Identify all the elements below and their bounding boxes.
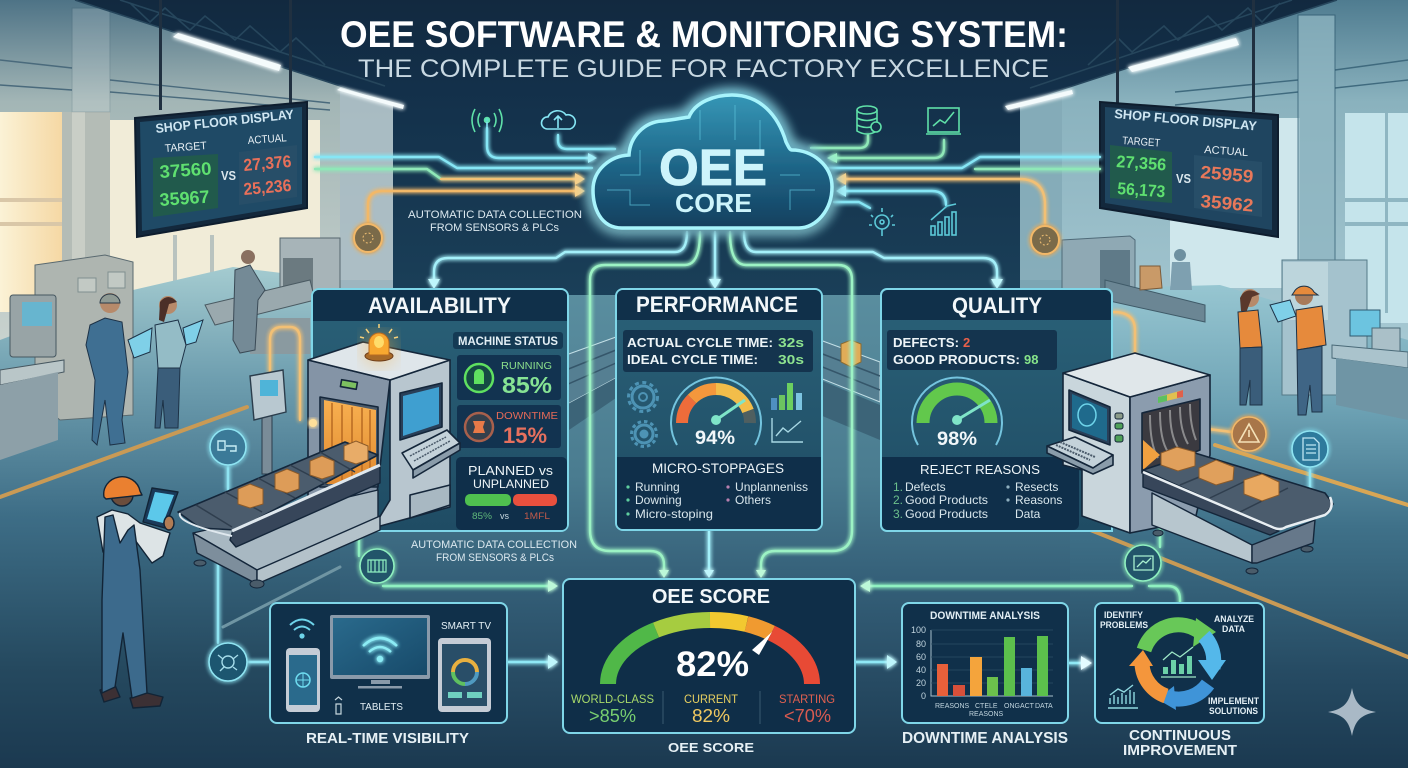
step labels: IDENTIFY xyxy=(1104,610,1144,621)
caption: automatic data collection top: FROM SENSORS & PLCs xyxy=(430,222,559,234)
icon: blue node network xyxy=(209,643,247,681)
reject reasons list: 3. xyxy=(893,507,903,521)
orange node right xyxy=(1031,226,1059,254)
planned vs unplanned: vs xyxy=(500,511,510,521)
cycle time readout: 32s xyxy=(778,335,804,350)
bar chart xyxy=(911,625,1053,718)
display title: SHOP FLOOR DISPLAY xyxy=(155,107,295,136)
display title: SHOP FLOOR DISPLAY xyxy=(1114,106,1258,133)
machine: quality inspection tunnel xyxy=(1047,353,1210,533)
icon: blue node machine link xyxy=(210,429,246,465)
world-class band xyxy=(571,692,654,726)
target values: 35967 xyxy=(159,187,210,210)
icon: sparkle watermark xyxy=(1328,688,1376,736)
caption: OEE score: OEE SCORE xyxy=(668,740,754,755)
mini line chart xyxy=(772,418,803,442)
roof trusses xyxy=(75,0,1337,103)
arrowheads xyxy=(428,153,1092,670)
running status card: RUNNING xyxy=(501,360,552,372)
vs: VS xyxy=(1176,171,1191,186)
target label: TARGET xyxy=(164,140,207,155)
bar chart: 60 xyxy=(916,652,926,662)
vs: VS xyxy=(221,168,236,183)
OEE score heading: OEE SCORE xyxy=(652,586,770,608)
icon: small remote xyxy=(335,697,342,714)
current band xyxy=(684,692,739,726)
machine status label: MACHINE STATUS xyxy=(458,334,558,348)
micro-stoppages list: Downing xyxy=(635,493,682,507)
icon: bulb network xyxy=(869,208,895,236)
actual values xyxy=(1200,162,1254,216)
step labels: ANALYZE xyxy=(1214,614,1254,625)
target values: 56,173 xyxy=(1117,179,1166,201)
reject reasons list: Good Products xyxy=(905,507,988,521)
orange node left xyxy=(354,224,382,252)
micro-stoppages list xyxy=(617,457,821,529)
micro-stoppages list: Others xyxy=(735,493,771,507)
bar chart: CTELE xyxy=(975,703,998,710)
reject reasons list: Reasons xyxy=(1015,493,1062,507)
target label: TARGET xyxy=(1122,135,1161,150)
starting band xyxy=(779,692,835,726)
cycle time readout: IDEAL CYCLE TIME: xyxy=(627,352,758,367)
micro-stoppages list: MICRO-STOPPAGES xyxy=(652,461,784,476)
icon: phone xyxy=(286,648,320,712)
starting band: STARTING xyxy=(779,692,835,706)
actual label: ACTUAL xyxy=(1204,144,1249,159)
planned vs unplanned: 85% xyxy=(472,511,492,521)
icon: tablet xyxy=(438,638,491,712)
icon: warning xyxy=(1232,417,1266,451)
cloud: OEE core xyxy=(593,95,832,228)
title line 2: THE COMPLETE GUIDE FOR FACTORY EXCELLENCE xyxy=(358,55,1049,83)
quality heading: QUALITY xyxy=(952,293,1042,318)
back worker xyxy=(233,250,265,353)
tablets label: TABLETS xyxy=(360,702,403,713)
reject reasons list: Data xyxy=(1015,507,1041,521)
panel: downtime analysis xyxy=(902,603,1068,723)
woman with tablet xyxy=(155,296,203,428)
icon: database xyxy=(857,106,881,134)
bar chart: REASONS xyxy=(969,711,1004,718)
world-class band: WORLD-CLASS xyxy=(571,692,654,706)
bar chart: 0 xyxy=(921,691,926,701)
beacon light xyxy=(360,324,398,367)
icon: document xyxy=(1292,431,1328,467)
planned vs unplanned xyxy=(456,457,567,530)
icon: green node left xyxy=(360,549,394,583)
reject reasons list xyxy=(882,457,1079,530)
boxes on availability conveyor xyxy=(238,441,368,508)
world-class band: >85% xyxy=(589,706,636,726)
people right xyxy=(1238,286,1326,415)
planned vs unplanned: PLANNED vs xyxy=(468,463,554,478)
bar chart: 80 xyxy=(916,639,926,649)
quality gauge xyxy=(912,378,1002,450)
icon: laptop trend xyxy=(926,108,961,134)
target values: 37560 xyxy=(159,158,212,182)
circuit traces xyxy=(607,105,815,210)
left shop floor display xyxy=(135,0,307,237)
reject reasons list: REJECT REASONS xyxy=(920,462,1040,477)
sensor on post xyxy=(250,370,286,474)
caption: continuous improvement: IMPROVEMENT xyxy=(1123,742,1237,759)
caption: real-time visibility: REAL-TIME VISIBILITY xyxy=(306,731,469,747)
caption: automatic data collection lower: AUTOMATIC DATA COLLECTION xyxy=(411,539,577,551)
center trend chart xyxy=(1163,656,1192,674)
woman in vest xyxy=(1238,289,1262,405)
score gauge xyxy=(608,620,812,684)
man in vest and hard hat xyxy=(1292,286,1326,415)
smart tv label: SMART TV xyxy=(441,621,491,632)
caption: downtime analysis: DOWNTIME ANALYSIS xyxy=(902,730,1068,747)
planned vs unplanned: 1MFL xyxy=(524,511,550,521)
performance heading: PERFORMANCE xyxy=(636,292,798,317)
tablet xyxy=(1270,300,1296,322)
icon: green node right xyxy=(1125,545,1161,581)
floor safety stripes xyxy=(0,407,1408,657)
icon: bar chart rising xyxy=(931,204,956,235)
step labels: PROBLEMS xyxy=(1100,620,1148,631)
icon: wifi xyxy=(290,620,314,638)
planned vs unplanned: UNPLANNED xyxy=(473,477,549,491)
machine: availability inspection tunnel xyxy=(308,342,460,528)
bar chart: ONGACT xyxy=(1004,703,1035,710)
caption: automatic data collection top: AUTOMATIC DATA COLLECTION xyxy=(408,209,582,221)
icon: glow node left xyxy=(309,419,317,427)
downtime status card xyxy=(457,405,561,448)
title xyxy=(340,14,1068,83)
CORE heading: CORE xyxy=(675,188,752,218)
OEE heading: OEE xyxy=(659,139,767,196)
panel: availability xyxy=(312,289,568,531)
panel: quality xyxy=(881,289,1112,531)
foreground worker with tablet xyxy=(97,477,178,708)
actual values xyxy=(243,152,292,199)
improvement cycle xyxy=(1129,618,1226,710)
icon: cloud upload xyxy=(541,111,575,129)
bar chart: REASONS xyxy=(935,703,970,710)
actual values: 27,376 xyxy=(243,152,292,175)
actual label: ACTUAL xyxy=(247,132,287,147)
availability heading: AVAILABILITY xyxy=(368,293,511,318)
quality gauge: 98% xyxy=(937,429,977,450)
panel: real-time visibility xyxy=(270,603,507,723)
performance gauge: 94% xyxy=(695,428,735,449)
actual values: 25,236 xyxy=(243,176,292,199)
right shop floor display xyxy=(1100,0,1278,237)
target values xyxy=(1116,152,1167,201)
current band: 82% xyxy=(692,706,730,726)
starting band: <70% xyxy=(784,706,831,726)
bar chart: 20 xyxy=(916,678,926,688)
boxes on quality conveyor xyxy=(1161,447,1279,501)
defects readout: 2 xyxy=(963,335,970,350)
caption: continuous improvement xyxy=(1123,727,1237,759)
icon: gears xyxy=(628,382,658,446)
step labels xyxy=(1100,610,1259,717)
data connectors into and out of cloud xyxy=(218,128,1310,663)
bar chart: DATA xyxy=(1035,703,1053,710)
performance gauge xyxy=(671,378,761,449)
actual values: 25959 xyxy=(1200,162,1254,187)
icon: monitor xyxy=(330,615,430,688)
caption: automatic data collection top xyxy=(408,209,582,234)
step labels: DATA xyxy=(1222,624,1245,635)
bar chart: 100 xyxy=(911,625,926,635)
people left xyxy=(86,250,265,445)
panel: OEE score xyxy=(563,579,855,733)
step labels: SOLUTIONS xyxy=(1209,706,1258,717)
target values: 27,356 xyxy=(1116,152,1167,174)
icon: antenna xyxy=(472,109,502,132)
ceiling lights xyxy=(173,33,1239,110)
bar chart: 40 xyxy=(916,665,926,675)
defects readout: DEFECTS: xyxy=(893,335,959,350)
target values xyxy=(159,158,212,210)
micro-stoppages list: Micro-stoping xyxy=(635,507,713,521)
running status card xyxy=(457,355,561,400)
background machines right xyxy=(1062,236,1408,420)
downtime status card: 15% xyxy=(503,423,547,448)
caption: automatic data collection lower xyxy=(411,539,577,564)
small trend chart xyxy=(1108,685,1138,708)
caption: continuous improvement: CONTINUOUS xyxy=(1129,727,1231,744)
step labels: IMPLEMENT xyxy=(1208,696,1259,707)
micro-stoppages list: Running xyxy=(635,480,680,494)
reject reasons list: Resects xyxy=(1015,480,1058,494)
chart title: DOWNTIME ANALYSIS xyxy=(930,610,1040,622)
reject reasons list: 2. xyxy=(893,493,903,507)
cycle time readout: 30s xyxy=(778,352,804,367)
running status card: 85% xyxy=(502,372,552,398)
micro-stoppages list: Unplanneniss xyxy=(735,480,808,494)
defects readout: 98 xyxy=(1024,352,1038,367)
caption: automatic data collection lower: FROM SENSORS & PLCs xyxy=(436,552,554,564)
score value: 82% xyxy=(676,645,749,684)
cycle time readout xyxy=(623,330,813,372)
mini bar chart xyxy=(771,383,802,410)
cycle time readout: ACTUAL CYCLE TIME: xyxy=(627,335,773,350)
panel: performance xyxy=(616,289,822,530)
title line 1: OEE SOFTWARE & MONITORING SYSTEM: xyxy=(340,14,1068,55)
panel: continuous improvement xyxy=(1095,603,1264,723)
reject reasons list: Defects xyxy=(905,480,946,494)
box on conveyor xyxy=(841,340,861,367)
worker with tablet xyxy=(86,293,152,445)
conveyor: quality xyxy=(1143,453,1333,574)
background machines left xyxy=(0,238,340,460)
actual values: 35962 xyxy=(1200,191,1254,216)
current band: CURRENT xyxy=(684,692,739,706)
reject reasons list: Good Products xyxy=(905,493,988,507)
defects readout xyxy=(887,330,1057,370)
conveyor: availability xyxy=(178,442,380,588)
reject reasons list: 1. xyxy=(893,480,903,494)
downtime status card: DOWNTIME xyxy=(496,410,558,422)
defects readout: GOOD PRODUCTS: xyxy=(893,352,1020,367)
background conveyors between panels xyxy=(566,337,880,440)
